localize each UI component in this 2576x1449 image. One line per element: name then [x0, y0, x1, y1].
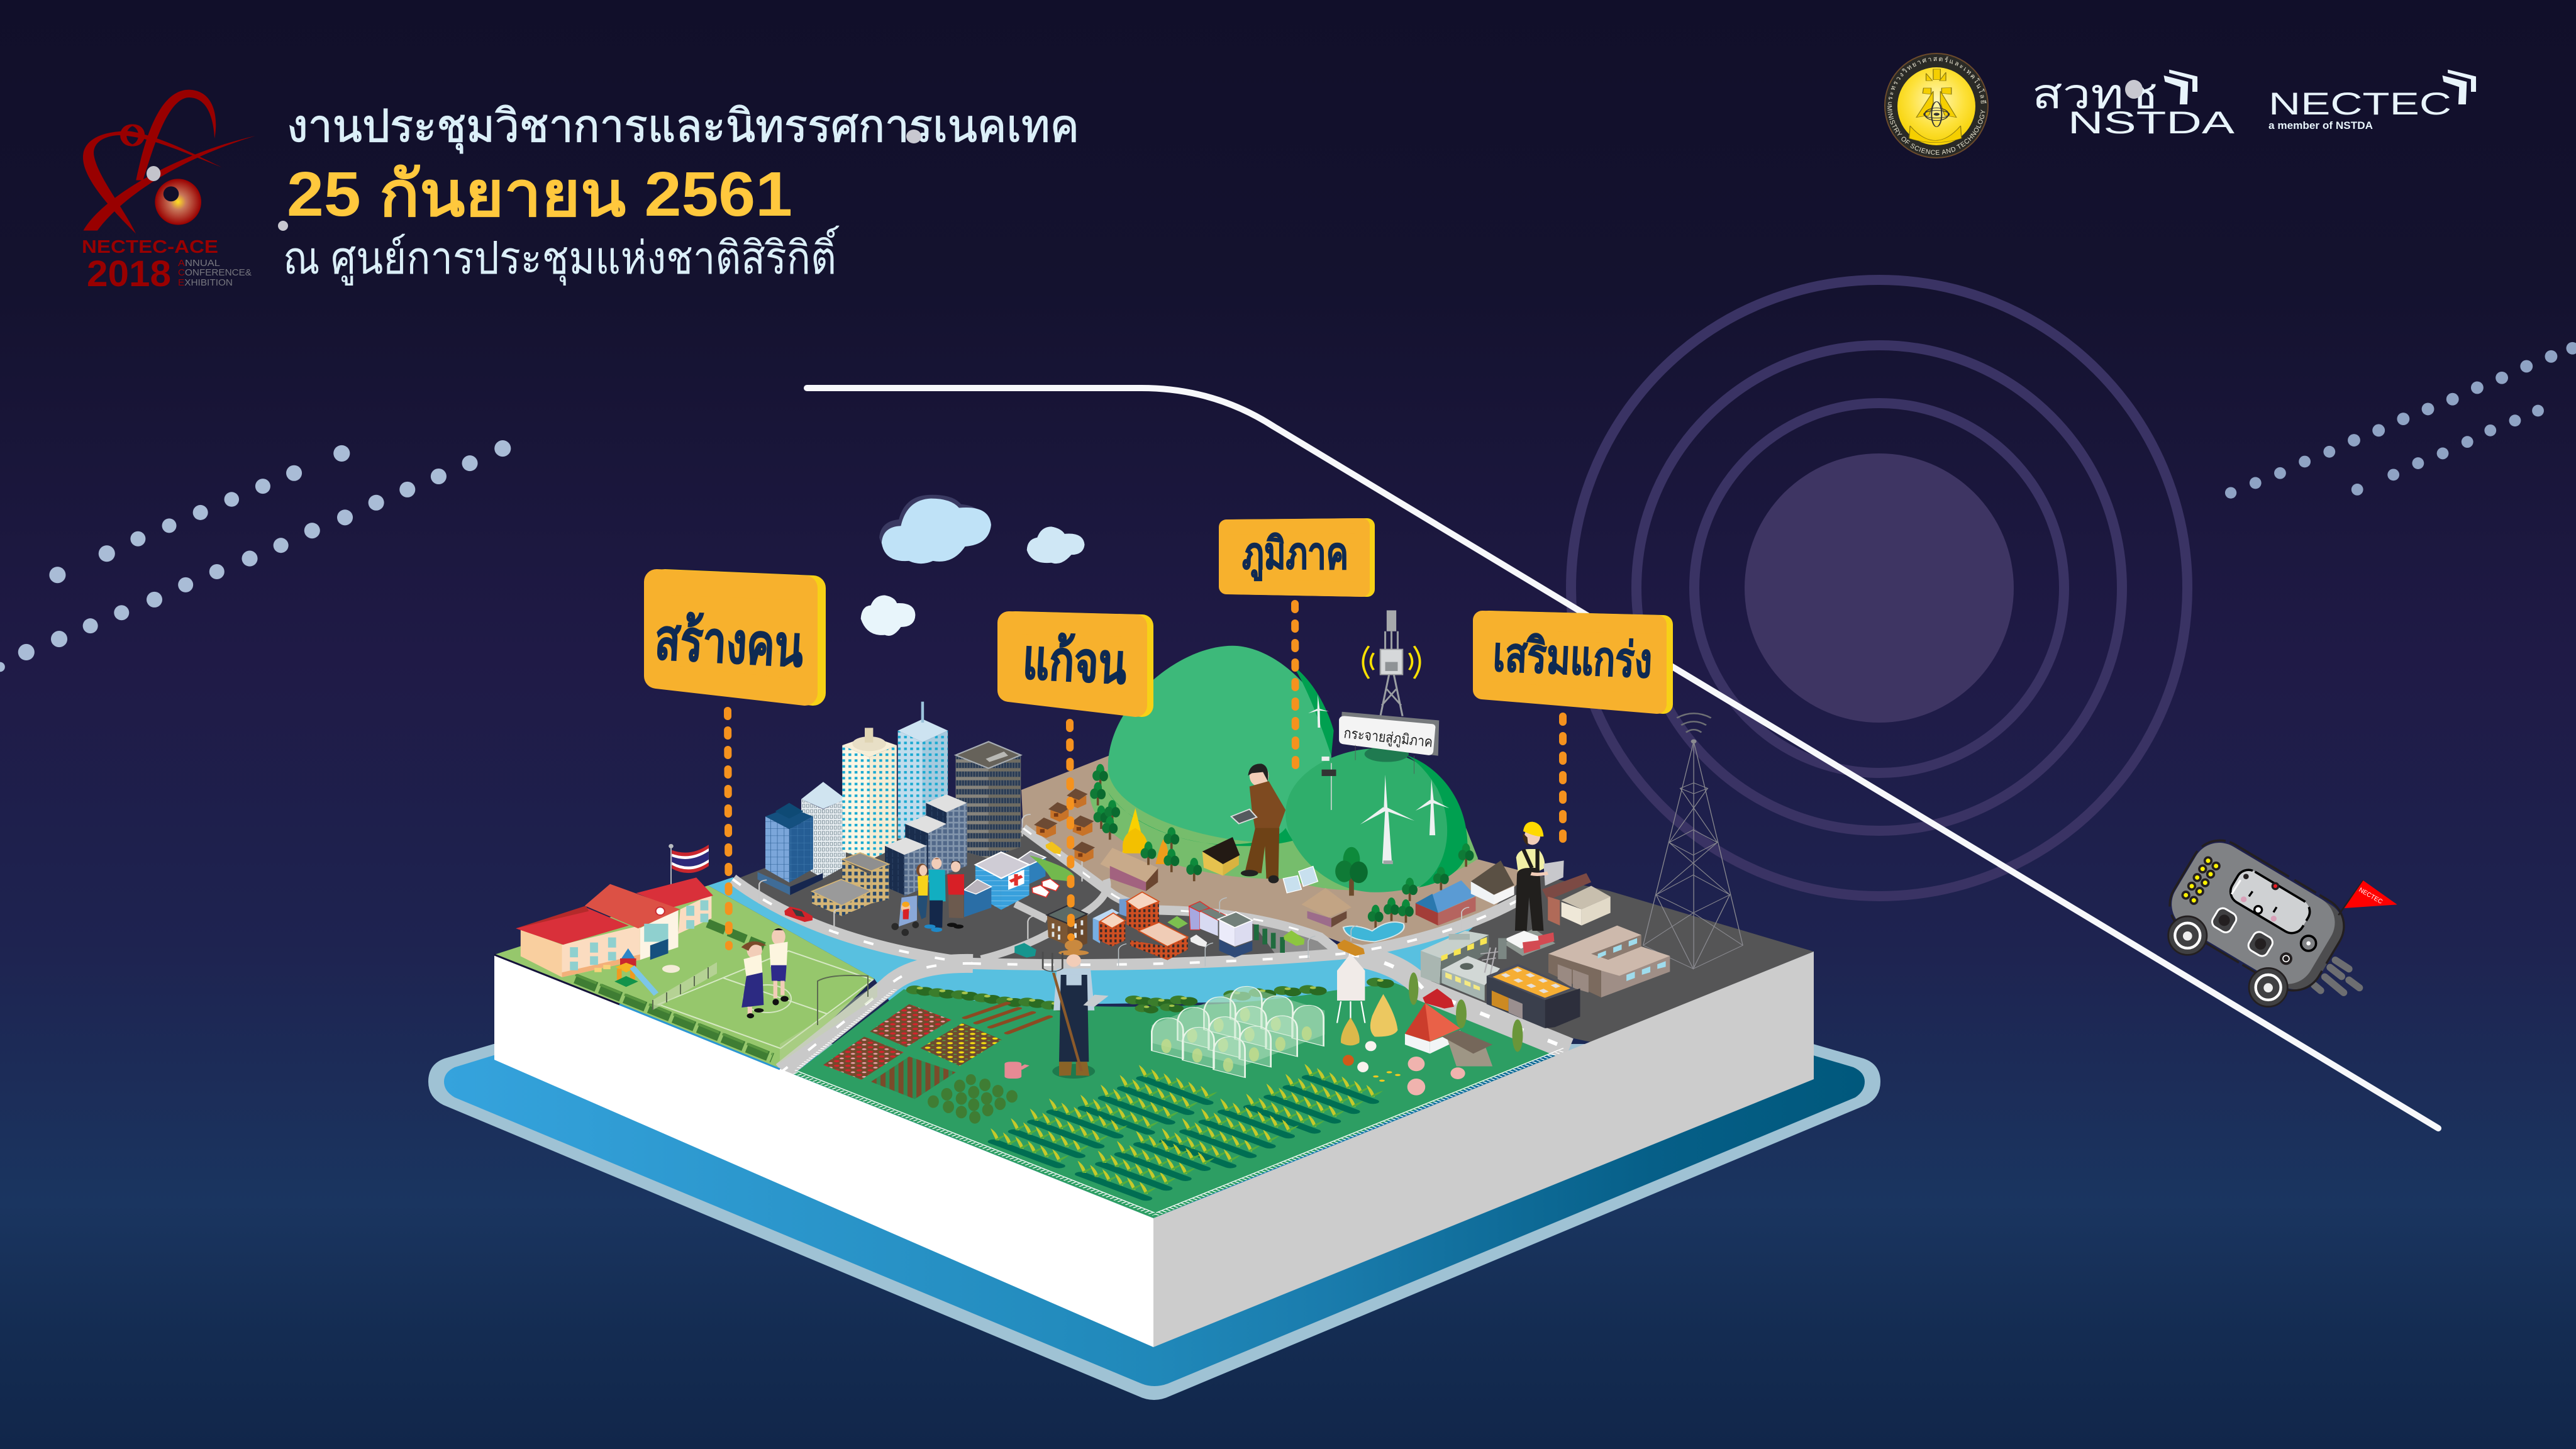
street lamps	[759, 814, 1090, 939]
road lamps	[1119, 897, 1358, 967]
farm	[795, 940, 1563, 1215]
logo: NSTDA: NSTDA	[2068, 105, 2235, 140]
street lamp	[1462, 908, 1469, 931]
hill signboard	[1339, 712, 1439, 774]
logo: NECTEC-ACE 2018: CONFERENCE&	[178, 267, 252, 278]
dotted lines left	[0, 440, 511, 672]
logo: ministry seal: กระทรวงวิทยาศาสตร์และเทคโนโลยี	[1888, 57, 1987, 106]
sign: เสริมแกร่ง: เสริมแกร่ง	[1492, 628, 1653, 688]
slab: left face	[494, 955, 1153, 1347]
sign: ภูมิภาค: ภูมิภาค	[1242, 529, 1348, 581]
logo: NECTEC-ACE 2018: NECTEC-ACE	[82, 237, 218, 257]
brown land	[1021, 752, 1522, 951]
logo: ministry seal	[1884, 53, 1989, 158]
road markings	[733, 828, 1569, 1072]
brown apartment	[1047, 906, 1087, 952]
sign: สร้างคน: สร้างคน	[653, 608, 805, 679]
warehouse	[1548, 926, 1670, 997]
park	[1030, 855, 1074, 882]
slab top edge accents	[494, 955, 619, 1004]
ground layers	[494, 752, 1814, 1218]
blue block	[1093, 898, 1131, 943]
tower: white pyramid	[801, 782, 846, 879]
signal arcs	[1363, 646, 1420, 679]
logo: NSTDA	[2032, 70, 2235, 140]
logo: NSTDA: สวทช	[2032, 70, 2158, 117]
red-roof house	[1405, 1003, 1460, 1053]
town buildings	[1014, 892, 1365, 967]
pagoda	[1122, 808, 1169, 864]
clouds	[861, 495, 1085, 636]
transmission tower	[1643, 713, 1743, 969]
white car	[1191, 935, 1207, 947]
school	[516, 844, 713, 994]
city towers	[757, 702, 1095, 939]
cloud small right	[1027, 526, 1085, 564]
logo: NECTEC: a member of NSTDA	[2268, 119, 2373, 131]
sign: สร้างคน	[653, 582, 813, 693]
sign: แก้จน	[1009, 623, 1142, 706]
base plate	[428, 1044, 1880, 1400]
hay stacks	[1341, 994, 1397, 1045]
roads	[733, 828, 1569, 1072]
logo: NECTEC-ACE 2018: EXHIBITION	[178, 277, 233, 288]
dashed connector lines	[728, 604, 1563, 947]
robot	[2159, 830, 2397, 1007]
official	[1231, 763, 1285, 883]
shack	[1442, 1030, 1492, 1066]
turbines	[1308, 694, 1449, 864]
dotted lines right	[2225, 342, 2576, 499]
watering can	[1004, 1062, 1027, 1079]
red car	[784, 907, 813, 922]
title line 1: งานประชุมวิชาการและนิทรรศการเนคเทค	[287, 101, 1079, 153]
decorative beads on title	[278, 130, 921, 231]
fruit bushes	[906, 978, 1394, 1013]
family	[891, 857, 964, 936]
hospital	[964, 851, 1045, 917]
pond	[1343, 922, 1404, 941]
flag: NECTEC	[2357, 887, 2384, 906]
grey factory	[1421, 931, 1489, 984]
planting beds	[823, 1004, 1002, 1099]
leds	[2182, 857, 2219, 904]
students	[741, 928, 789, 1018]
bungalow	[1301, 888, 1352, 927]
village huts	[1034, 789, 1095, 862]
small industrial block	[1542, 873, 1611, 926]
farmer	[1043, 940, 1109, 1079]
school field	[494, 886, 874, 1070]
ambulances	[1032, 879, 1059, 897]
tower: dark blue	[757, 803, 823, 895]
pitch fences	[653, 962, 877, 1063]
hills	[1090, 646, 1478, 892]
tower: light blue	[898, 702, 948, 841]
title line 3: venue: ณ ศูนย์การประชุมแห่งชาติสิริกิติ์	[283, 225, 839, 286]
sign: แก้จน: แก้จน	[1021, 628, 1128, 696]
wind turbines and towers on hill	[1090, 610, 1743, 1066]
tower: cream	[842, 728, 897, 860]
flag	[2338, 880, 2397, 915]
tudor house	[1202, 837, 1240, 875]
white house	[1471, 860, 1514, 904]
white-blue offices	[1189, 901, 1252, 958]
tower: stepped blue-grey	[885, 794, 967, 896]
teal car	[1014, 943, 1036, 958]
farm	[794, 983, 1563, 1218]
small park	[1167, 916, 1188, 929]
industrial asphalt	[1418, 873, 1814, 1042]
thai house	[1100, 848, 1158, 891]
body	[2159, 830, 2355, 1002]
hedge along school field	[575, 975, 772, 1058]
barn	[1416, 880, 1475, 926]
orange car	[1337, 940, 1365, 956]
logo: ministry seal: MINISTRY OF SCIENCE AND TECHNOLOGY	[1887, 106, 1985, 155]
slab blue edge	[619, 1004, 780, 1069]
small hill	[1285, 748, 1467, 892]
pylon	[1480, 948, 1499, 975]
industrial zone	[1421, 822, 1670, 1028]
logo: NECTEC: NECTEC	[2268, 86, 2451, 121]
logo: NECTEC-ACE 2018: ANNUAL	[178, 258, 220, 269]
EV parking lot	[1252, 921, 1333, 956]
hill sign text: กระจายสู่ภูมิภาค	[1343, 724, 1433, 751]
farm animals	[1343, 1041, 1465, 1096]
slab: right face	[1153, 952, 1814, 1347]
white route line	[807, 388, 2438, 1128]
face	[2231, 874, 2279, 921]
silo	[1337, 953, 1365, 1023]
concentric circles	[1571, 280, 2187, 896]
sign: เสริมแกร่ง	[1482, 620, 1663, 704]
greenhouses	[1152, 986, 1324, 1077]
title line 2: date: 25 กันยายน 2561	[287, 159, 792, 230]
monitoring tower	[1380, 610, 1402, 716]
battery pack BMS	[1498, 929, 1555, 959]
benches	[594, 965, 611, 972]
big hill	[1108, 646, 1331, 842]
boy	[769, 928, 789, 1006]
young trees	[928, 1074, 1018, 1124]
hedge behind football field	[708, 923, 764, 947]
logo: NECTEC	[2268, 70, 2476, 131]
football pitch markings	[658, 951, 873, 1048]
tan block	[812, 853, 889, 916]
joysticks	[2210, 906, 2316, 965]
white fence	[795, 989, 1563, 1215]
river	[708, 877, 1560, 1006]
logo: NECTEC-ACE 2018	[82, 90, 255, 294]
logo: NECTEC-ACE 2018: 2018	[87, 253, 171, 294]
girl	[741, 941, 767, 1018]
worker	[1515, 822, 1564, 931]
EV chargers	[1254, 924, 1285, 953]
wheels	[2168, 916, 2287, 1007]
speed lines	[2314, 960, 2360, 992]
weather station	[1322, 757, 1336, 810]
green car	[1284, 930, 1304, 946]
cloud small left	[861, 595, 915, 636]
city asphalt	[733, 799, 1340, 965]
flagpole and flag	[669, 844, 709, 906]
crop fields	[991, 1064, 1383, 1199]
red car on road	[1423, 989, 1454, 1009]
sign: ภูมิภาค	[1226, 526, 1367, 589]
cloud large	[879, 495, 991, 564]
tower: grey	[956, 741, 1021, 858]
carrot rows	[965, 1003, 1050, 1033]
brick blocks	[1099, 892, 1188, 960]
solar panels	[1283, 866, 1318, 893]
yellow car	[1045, 841, 1062, 854]
playground	[614, 948, 680, 994]
trees	[1090, 764, 1474, 928]
dark building orange roof	[1487, 963, 1580, 1028]
hill base	[1090, 767, 1478, 891]
factory annex	[1441, 956, 1500, 1001]
poplars	[1409, 972, 1523, 1052]
